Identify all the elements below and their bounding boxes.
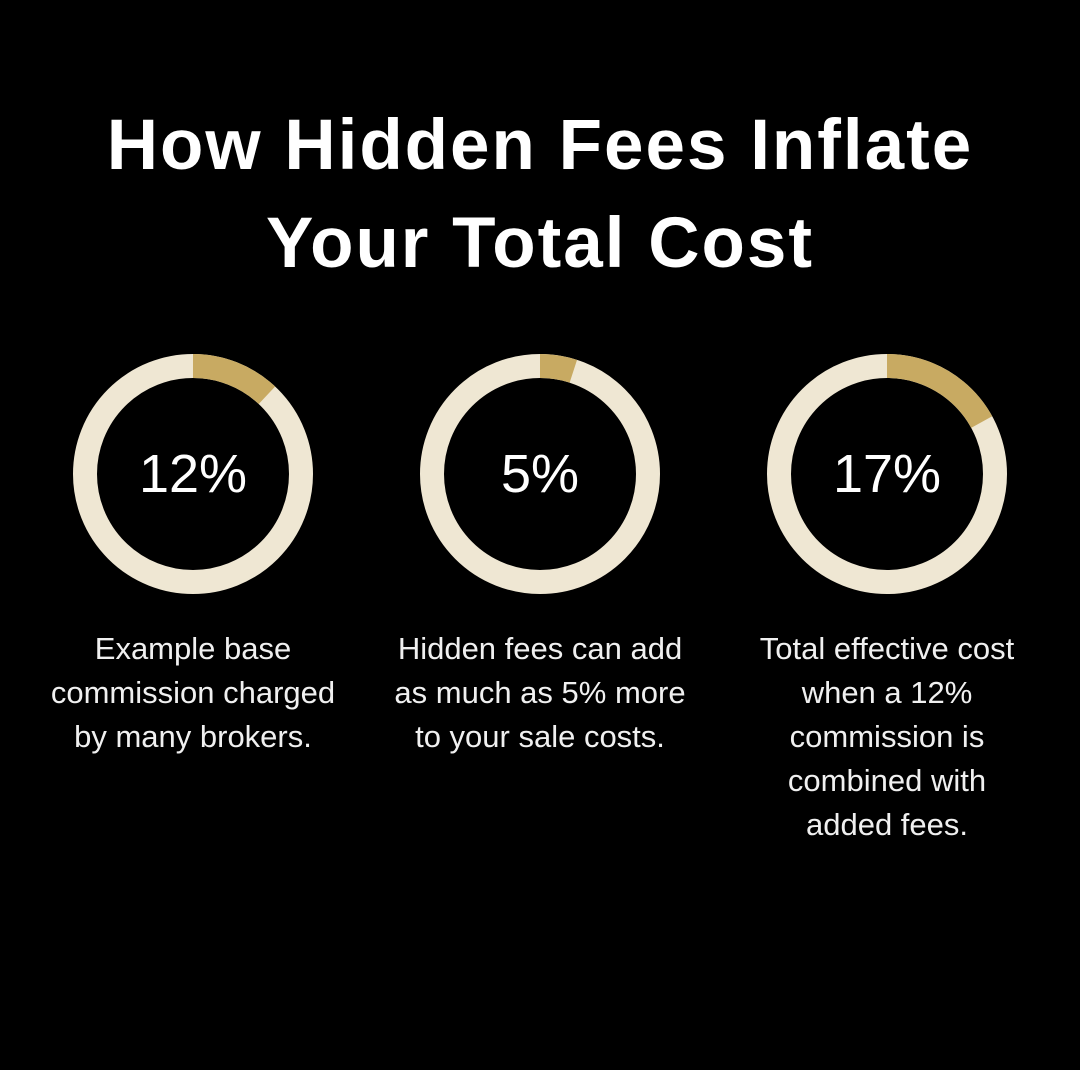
description: Example base — [95, 631, 291, 666]
title — [107, 106, 973, 283]
donut chart: 17% — [767, 354, 1007, 594]
title: Your Total Cost — [266, 204, 814, 283]
panel: hidden fees — [394, 354, 686, 754]
description: combined with — [788, 763, 986, 798]
percentage: 17%: 17% — [833, 444, 941, 504]
title: How Hidden Fees Inflate — [107, 106, 973, 185]
description: when a 12% — [802, 675, 972, 710]
description — [760, 631, 1014, 842]
description: Total effective cost — [760, 631, 1014, 666]
description: commission is — [790, 719, 984, 754]
description — [51, 631, 335, 754]
description: added fees. — [806, 807, 968, 842]
donut chart: 12% — [73, 354, 313, 594]
description: by many brokers. — [74, 719, 312, 754]
description: to your sale costs. — [415, 719, 665, 754]
donut chart: 5% — [420, 354, 660, 594]
percentage: 12%: 12% — [139, 444, 247, 504]
description: as much as 5% more — [394, 675, 686, 710]
percentage: 5%: 5% — [501, 444, 579, 504]
description: Hidden fees can add — [398, 631, 682, 666]
panel: total cost — [760, 354, 1014, 842]
description — [394, 631, 686, 754]
panel: base commission — [51, 354, 335, 754]
description: commission charged — [51, 675, 335, 710]
